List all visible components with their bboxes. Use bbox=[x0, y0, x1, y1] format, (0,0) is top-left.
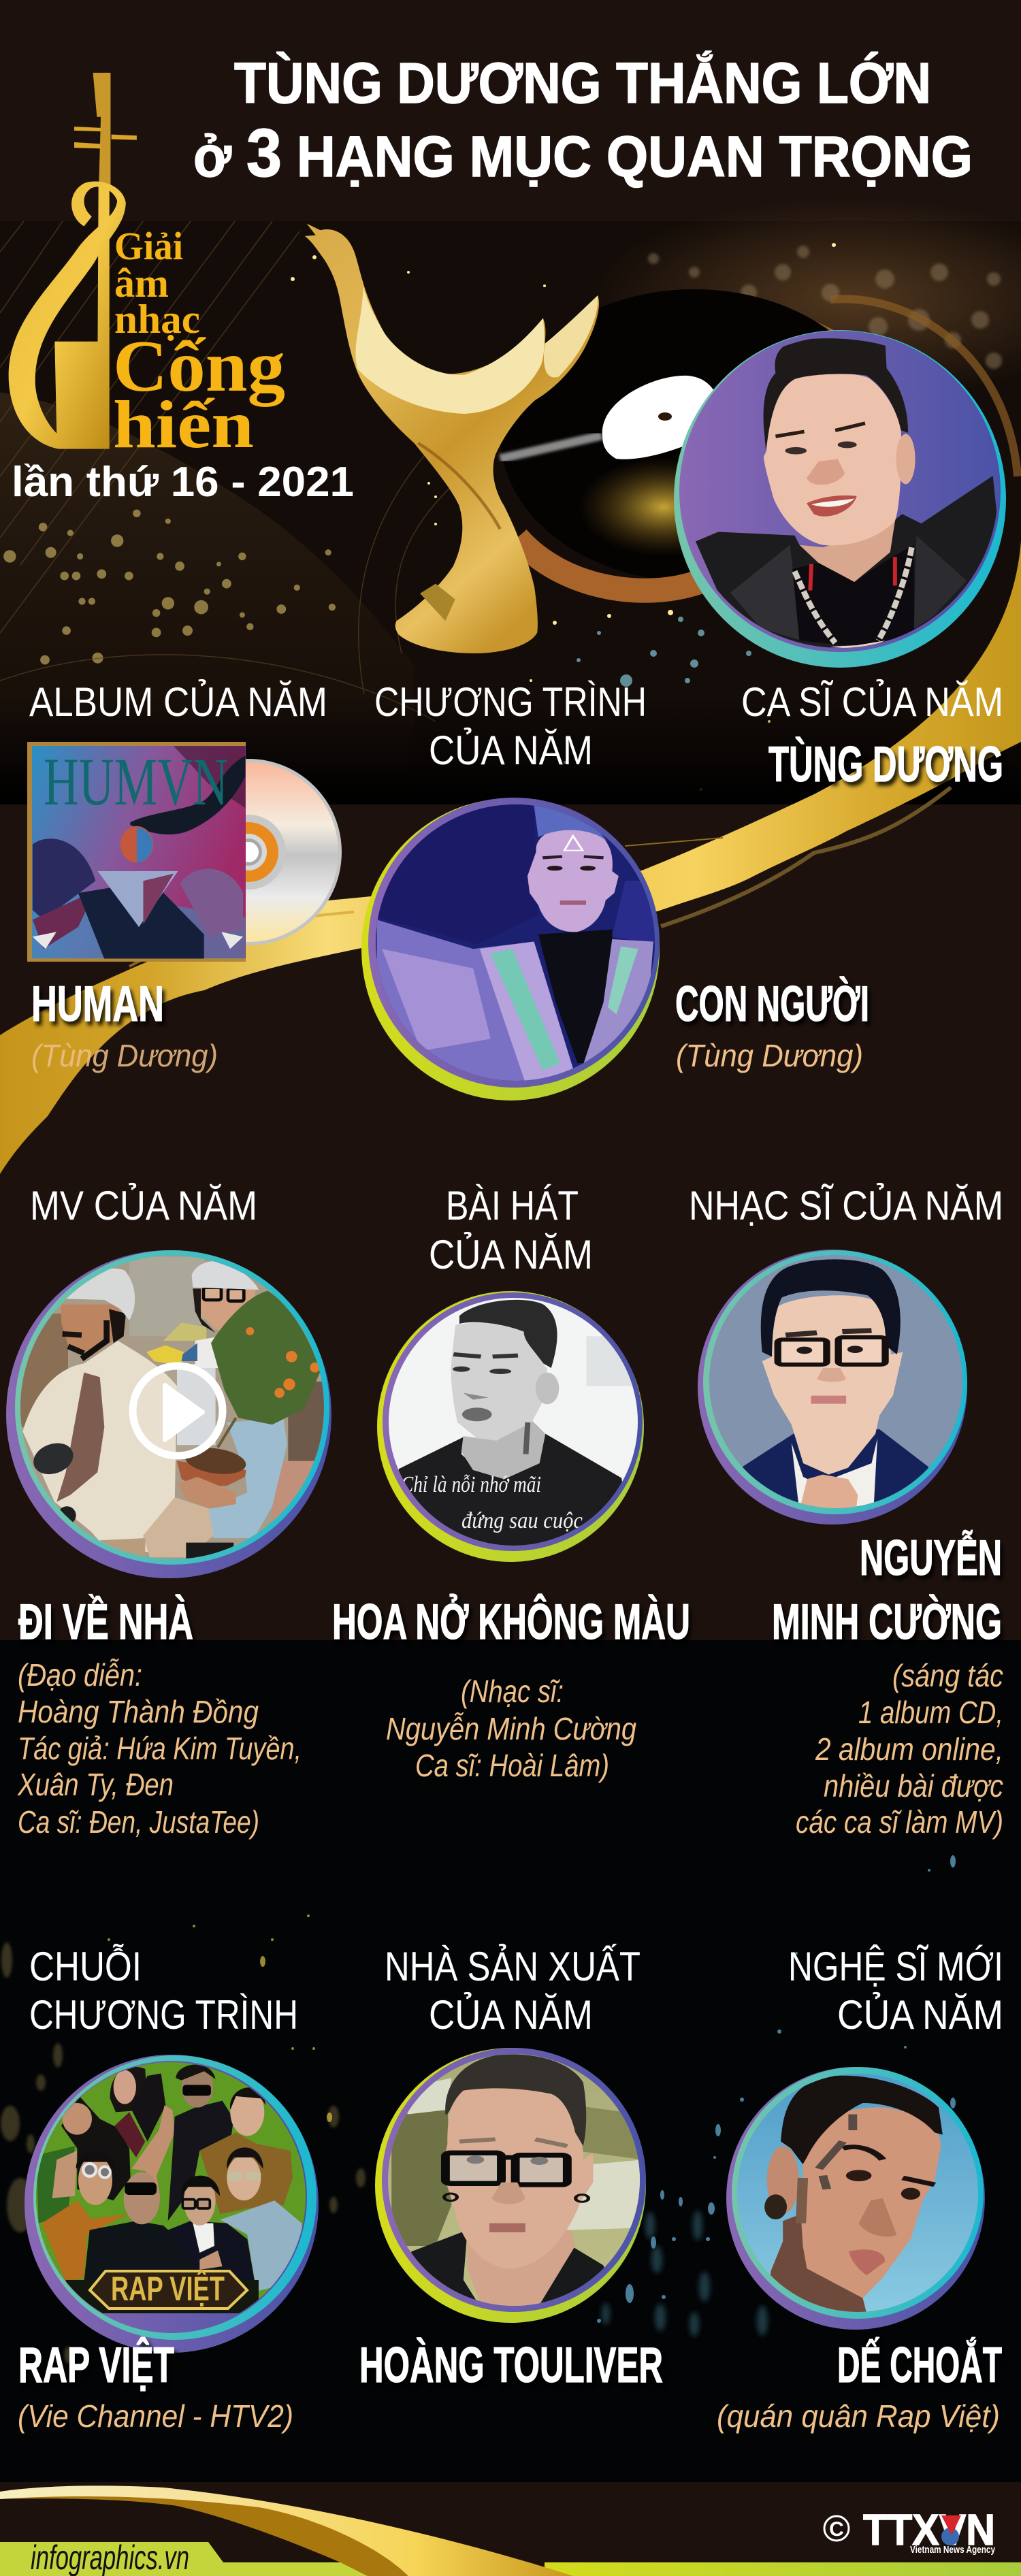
panel: singer of the year portrait bbox=[674, 327, 1007, 668]
label: song of the year: BÀI HÁT bbox=[446, 1183, 579, 1228]
text block: MV credits: Xuân Ty, Đen bbox=[17, 1767, 174, 1802]
logo: Giải âm nhạc Cống hiến: Cống bbox=[113, 326, 285, 407]
label: song of the year bbox=[429, 1183, 593, 1277]
icon: gold bird trophy bbox=[305, 223, 599, 653]
label: producer of the year: NHÀ SẢN XUẤT bbox=[385, 1944, 641, 1989]
label: programme of the year bbox=[374, 679, 647, 773]
text block: composer credits bbox=[796, 1658, 1003, 1840]
label: series of the year: CHUỖI bbox=[29, 1944, 142, 1989]
text block: MV credits: Tác giả: Hứa Kim Tuyền, bbox=[18, 1731, 302, 1766]
panel: song Hoa nở không màu photo: Chỉ là nỗi nhớ mãi bbox=[401, 1472, 541, 1497]
logo: TTXVN news agency: TTXVN bbox=[863, 2505, 995, 2554]
panel: MV Đi về nhà photo bbox=[6, 1250, 331, 1578]
credit: Tùng Dương: (Tùng Dương) bbox=[31, 1038, 218, 1073]
text block: composer credits: (sáng tác bbox=[892, 1658, 1003, 1693]
vinyl record behind the trophy bbox=[500, 289, 1018, 591]
label: song of the year: CỦA NĂM bbox=[429, 1232, 593, 1277]
name: Nguyễn Minh Cường bbox=[772, 1531, 1002, 1650]
site address: infographics.vn bbox=[31, 2539, 189, 2576]
name: Đi về nhà: ĐI VỀ NHÀ bbox=[18, 1595, 193, 1650]
logo: Giải âm nhạc Cống hiến: Giải bbox=[114, 224, 183, 268]
panel: composer Nguyễn Minh Cường portrait bbox=[698, 1250, 967, 1525]
background: lower starry band bbox=[0, 1640, 1021, 2482]
text block: song credits: Ca sĩ: Hoài Lâm) bbox=[415, 1748, 609, 1783]
panel: Rap Việt group photo bbox=[25, 2055, 319, 2353]
label: new artist of the year bbox=[788, 1944, 1003, 2038]
label: series of the year: CHƯƠNG TRÌNH bbox=[29, 1992, 298, 2038]
logo: Rap Việt plaque: RAP VIỆT bbox=[111, 2270, 225, 2308]
panel: Hoàng Touliver portrait bbox=[375, 2048, 647, 2323]
gold ribbon bbox=[0, 541, 1021, 1174]
name: Rap Việt: RAP VIỆT bbox=[18, 2338, 174, 2393]
background: award band bbox=[0, 804, 1021, 1640]
label: MV of the year: MV CỦA NĂM bbox=[30, 1183, 257, 1228]
text block: MV credits: Ca sĩ: Đen, JustaTee) bbox=[18, 1804, 259, 1840]
background: starry hero band bbox=[0, 197, 1021, 804]
logo: Giải âm nhạc Cống hiến bbox=[9, 73, 285, 462]
label: series of the year bbox=[29, 1944, 298, 2038]
label: producer of the year bbox=[385, 1944, 641, 2038]
album cover: HUMVN bbox=[44, 744, 228, 819]
credit: Tùng Dương: (Tùng Dương) bbox=[676, 1038, 863, 1073]
background: footer band bbox=[0, 2482, 1021, 2576]
label: new artist of the year: CỦA NĂM bbox=[837, 1992, 1003, 2038]
edition text: lần thứ 16 - 2021 bbox=[12, 459, 354, 506]
text block: MV credits bbox=[17, 1657, 302, 1840]
logo: TTXVN news agency: Vietnam News Agency bbox=[910, 2544, 996, 2556]
panel: song Hoa nở không màu photo bbox=[377, 1291, 644, 1562]
logo: Giải âm nhạc Cống hiến: hiến bbox=[113, 387, 254, 462]
title bbox=[193, 51, 973, 191]
logo: Giải âm nhạc Cống hiến: âm bbox=[114, 261, 169, 306]
panel: Dế Choắt portrait bbox=[726, 2067, 987, 2330]
text block: song credits: Nguyễn Minh Cường bbox=[386, 1711, 636, 1746]
icon: play button bbox=[133, 1366, 223, 1456]
album cover bbox=[27, 742, 246, 962]
background: header band bbox=[0, 0, 1021, 221]
label: programme of the year: CỦA NĂM bbox=[429, 728, 593, 773]
panel: album Human bbox=[27, 742, 342, 962]
text block: song credits: (Nhạc sĩ: bbox=[461, 1674, 564, 1709]
name: Con Người: CON NGƯỜI bbox=[675, 977, 869, 1032]
icon: compact disc bbox=[155, 759, 342, 945]
credit: Rap Việt champion: (quán quân Rap Việt) bbox=[717, 2398, 1000, 2434]
name: Human: HUMAN bbox=[31, 977, 164, 1032]
label: programme of the year: CHƯƠNG TRÌNH bbox=[374, 679, 647, 725]
name: Hoa nở không màu: HOA NỞ KHÔNG MÀU bbox=[332, 1595, 690, 1650]
text block: MV credits: (Đạo diễn: bbox=[18, 1657, 142, 1693]
text block: MV credits: Hoàng Thành Đồng bbox=[18, 1694, 259, 1729]
text block: song credits bbox=[386, 1674, 636, 1783]
label: producer of the year: CỦA NĂM bbox=[429, 1992, 593, 2038]
logo: Giải âm nhạc Cống hiến: nhạc bbox=[114, 297, 200, 342]
label: album of the year: ALBUM CỦA NĂM bbox=[29, 679, 327, 725]
name: Hoàng Touliver: HOÀNG TOULIVER bbox=[359, 2338, 663, 2393]
credit: Vie Channel: (Vie Channel - HTV2) bbox=[18, 2398, 293, 2434]
logo: TTXVN news agency: C bbox=[829, 2518, 844, 2541]
title: ở 3 HẠNG MỤC QUAN TRỌNG bbox=[193, 115, 973, 191]
title: TÙNG DƯƠNG THẮNG LỚN bbox=[234, 51, 931, 115]
panel: song Hoa nở không màu photo: đứng sau cuộc bbox=[461, 1508, 583, 1533]
panel: programme Con Người portrait bbox=[361, 796, 660, 1100]
footer ribbon and site tab bbox=[0, 2485, 1021, 2576]
